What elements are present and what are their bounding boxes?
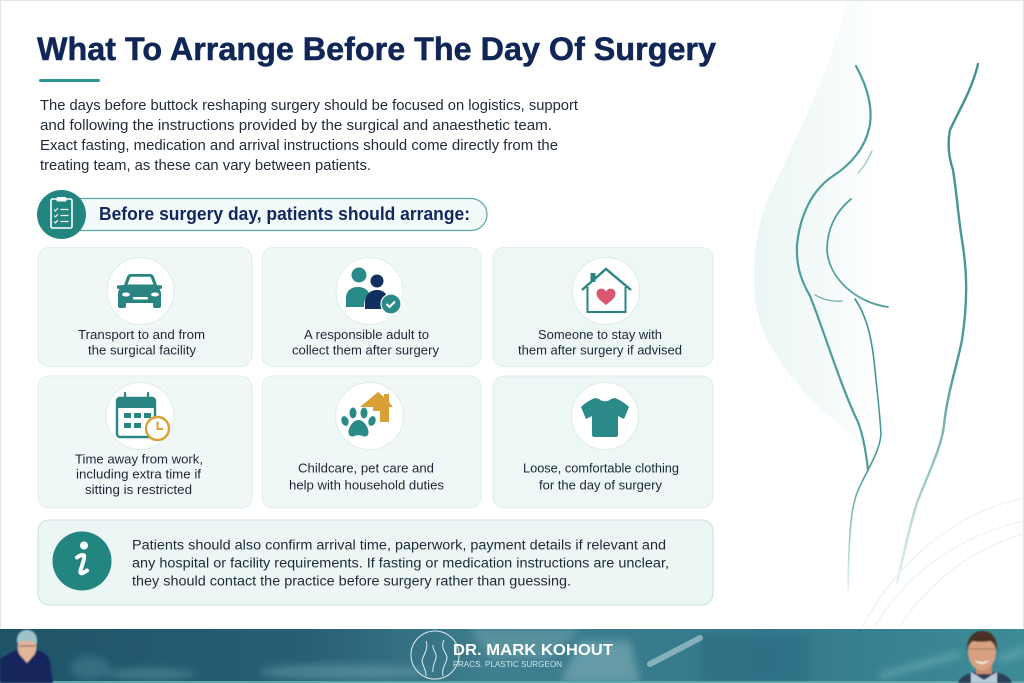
card text: sitting is restricted bbox=[85, 483, 192, 497]
intro paragraph: The days before buttock reshaping surgery should be focused on logistics, support bbox=[40, 98, 578, 114]
card: time away from work bbox=[38, 376, 252, 508]
card text: Someone to stay with bbox=[538, 328, 662, 342]
card text: them after surgery if advised bbox=[518, 344, 682, 358]
portrait: doctor smiling bbox=[958, 631, 1012, 683]
card text: collect them after surgery bbox=[292, 344, 440, 358]
logo bbox=[411, 631, 613, 679]
card text: Time away from work, bbox=[75, 452, 203, 466]
card text bbox=[75, 452, 203, 497]
footer banner bbox=[0, 629, 1024, 683]
card: loose clothing bbox=[493, 376, 713, 508]
card: responsible adult bbox=[262, 248, 481, 366]
intro paragraph: Exact fasting, medication and arrival instructions should come directly from the bbox=[40, 138, 558, 154]
callout text: they should contact the practice before surgery rather than guessing. bbox=[132, 574, 571, 588]
card text: Transport to and from bbox=[78, 328, 205, 342]
card text bbox=[523, 462, 679, 492]
icon: house with heart bbox=[582, 269, 631, 312]
logo: FRACS. PLASTIC SURGEON bbox=[453, 660, 562, 669]
background wash bbox=[754, 1, 885, 448]
card text: for the day of surgery bbox=[539, 478, 663, 492]
icon: two people with check bbox=[346, 268, 401, 314]
icon: clipboard checklist bbox=[37, 190, 86, 239]
card text: Loose, comfortable clothing bbox=[523, 462, 679, 476]
icon: paw and house bbox=[340, 392, 393, 437]
card: someone to stay bbox=[493, 248, 713, 366]
body silhouette illustration bbox=[754, 1, 1023, 626]
icon: car bbox=[117, 274, 162, 308]
card text: help with household duties bbox=[289, 478, 444, 492]
section heading pill bbox=[37, 190, 487, 239]
card text: the surgical facility bbox=[88, 344, 197, 358]
card: childcare and pet care bbox=[262, 376, 481, 508]
intro paragraph: treating team, as these can vary between patients. bbox=[40, 158, 371, 174]
heading text: Before surgery day, patients should arrange: bbox=[99, 204, 470, 224]
title: What To Arrange Before The Day Of Surgery bbox=[37, 31, 716, 67]
icon: information bbox=[52, 532, 112, 590]
callout text bbox=[132, 538, 669, 588]
intro paragraph bbox=[40, 98, 578, 174]
card text bbox=[78, 328, 205, 358]
card: transport bbox=[38, 248, 252, 366]
callout text: Patients should also confirm arrival time, paperwork, payment details if relevant and bbox=[132, 538, 666, 552]
callout text: any hospital or facility requirements. If fasting or medication instructions are unclear, bbox=[132, 556, 669, 570]
card text: including extra time if bbox=[76, 468, 202, 482]
title underline bbox=[39, 79, 100, 82]
card text bbox=[289, 462, 444, 492]
logo mark bbox=[411, 631, 459, 679]
intro paragraph: and following the instructions provided by the surgical and anaesthetic team. bbox=[40, 118, 552, 134]
portrait: surgeon in scrubs bbox=[0, 630, 53, 683]
info callout bbox=[38, 520, 713, 605]
icon: calendar and clock bbox=[116, 393, 169, 440]
logo text: DR. MARK KOHOUT bbox=[453, 642, 613, 659]
card text bbox=[518, 328, 682, 358]
card text bbox=[292, 328, 440, 358]
card text: A responsible adult to bbox=[304, 328, 429, 342]
card text: Childcare, pet care and bbox=[298, 462, 434, 476]
icon: t-shirt bbox=[581, 398, 629, 437]
